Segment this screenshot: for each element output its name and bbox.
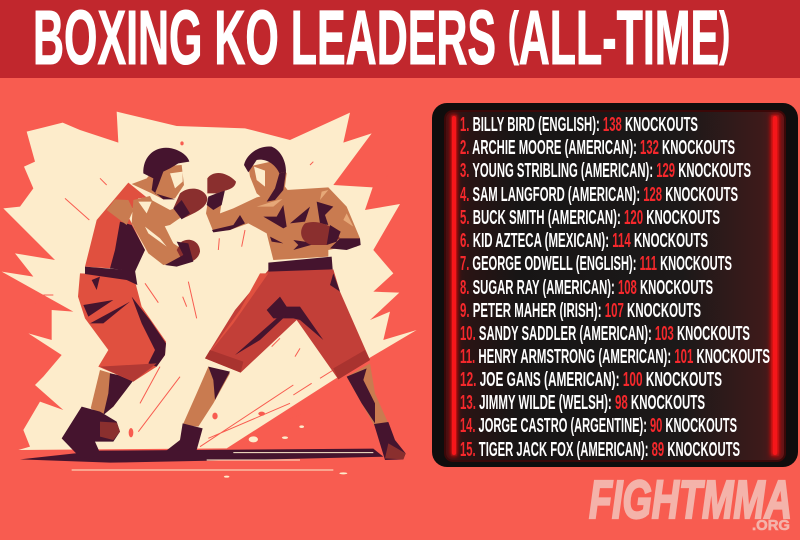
logo: FightMMA.org [589, 470, 792, 534]
ranking list: 2. ARCHIE MOORE (AMERICAN): 132 KNOCKOUTS [460, 137, 735, 159]
left boxer belt [85, 267, 137, 285]
ranking list [460, 114, 770, 461]
panel: knockout leaders [432, 103, 798, 467]
speed lines and sparks [7, 113, 405, 447]
panel inner [445, 111, 785, 461]
left boxer [62, 148, 207, 457]
left boxer back leg [91, 370, 133, 415]
ranking list: 3. YOUNG STRIBLING (AMERICAN): 129 KNOCKOUTS [460, 160, 751, 182]
neon bar right [771, 115, 779, 456]
ranking list: 8. SUGAR RAY (AMERICAN): 108 KNOCKOUTS [460, 277, 713, 299]
panel frame [432, 103, 798, 467]
left boxer shoes [62, 407, 120, 457]
ranking list: 7. GEORGE ODWELL (ENGLISH): 111 KNOCKOUTS [460, 253, 732, 275]
ranking list: 1. BILLY BIRD (ENGLISH): 138 KNOCKOUTS [460, 114, 698, 136]
ranking list: 14. JORGE CASTRO (ARGENTINE): 90 KNOCKOUTS [460, 415, 737, 437]
right boxer gloves [207, 190, 225, 210]
illustration: two boxers [2, 112, 417, 478]
right boxer belt [268, 257, 333, 272]
neon bar left [451, 115, 457, 456]
title: ( [508, 1, 519, 66]
ranking list: 9. PETER MAHER (IRISH): 107 KNOCKOUTS [460, 300, 701, 322]
burst background [2, 112, 417, 450]
header banner [0, 0, 800, 78]
ranking list: 15. TIGER JACK FOX (AMERICAN): 89 KNOCKOUTS [460, 439, 740, 461]
left boxer shorts [78, 273, 166, 382]
ground shadow [20, 449, 383, 470]
title: ) [719, 1, 730, 66]
right boxer shorts [205, 269, 370, 379]
right boxer torso [206, 187, 360, 260]
ranking list: 10. SANDY SADDLER (AMERICAN): 103 KNOCKOUTS [460, 323, 750, 345]
left boxer torso [133, 197, 187, 265]
right boxer head [248, 160, 293, 202]
right boxer [165, 146, 406, 460]
right boxer legs [183, 367, 230, 427]
ranking list: 12. JOE GANS (AMERICAN): 100 KNOCKOUTS [460, 369, 722, 391]
ranking list: 13. JIMMY WILDE (WELSH): 98 KNOCKOUTS [460, 392, 705, 414]
ranking list: 5. BUCK SMITH (AMERICAN): 120 KNOCKOUTS [460, 207, 720, 229]
left boxer gloves [173, 189, 207, 218]
right boxer shoes [165, 423, 203, 452]
logo suffix: .ORG [752, 517, 790, 534]
left boxer head [132, 165, 184, 199]
ranking list: 6. KID AZTECA (MEXICAN): 114 KNOCKOUTS [460, 230, 708, 252]
ranking list: 4. SAM LANGFORD (AMERICAN): 128 KNOCKOUTS [460, 184, 738, 206]
